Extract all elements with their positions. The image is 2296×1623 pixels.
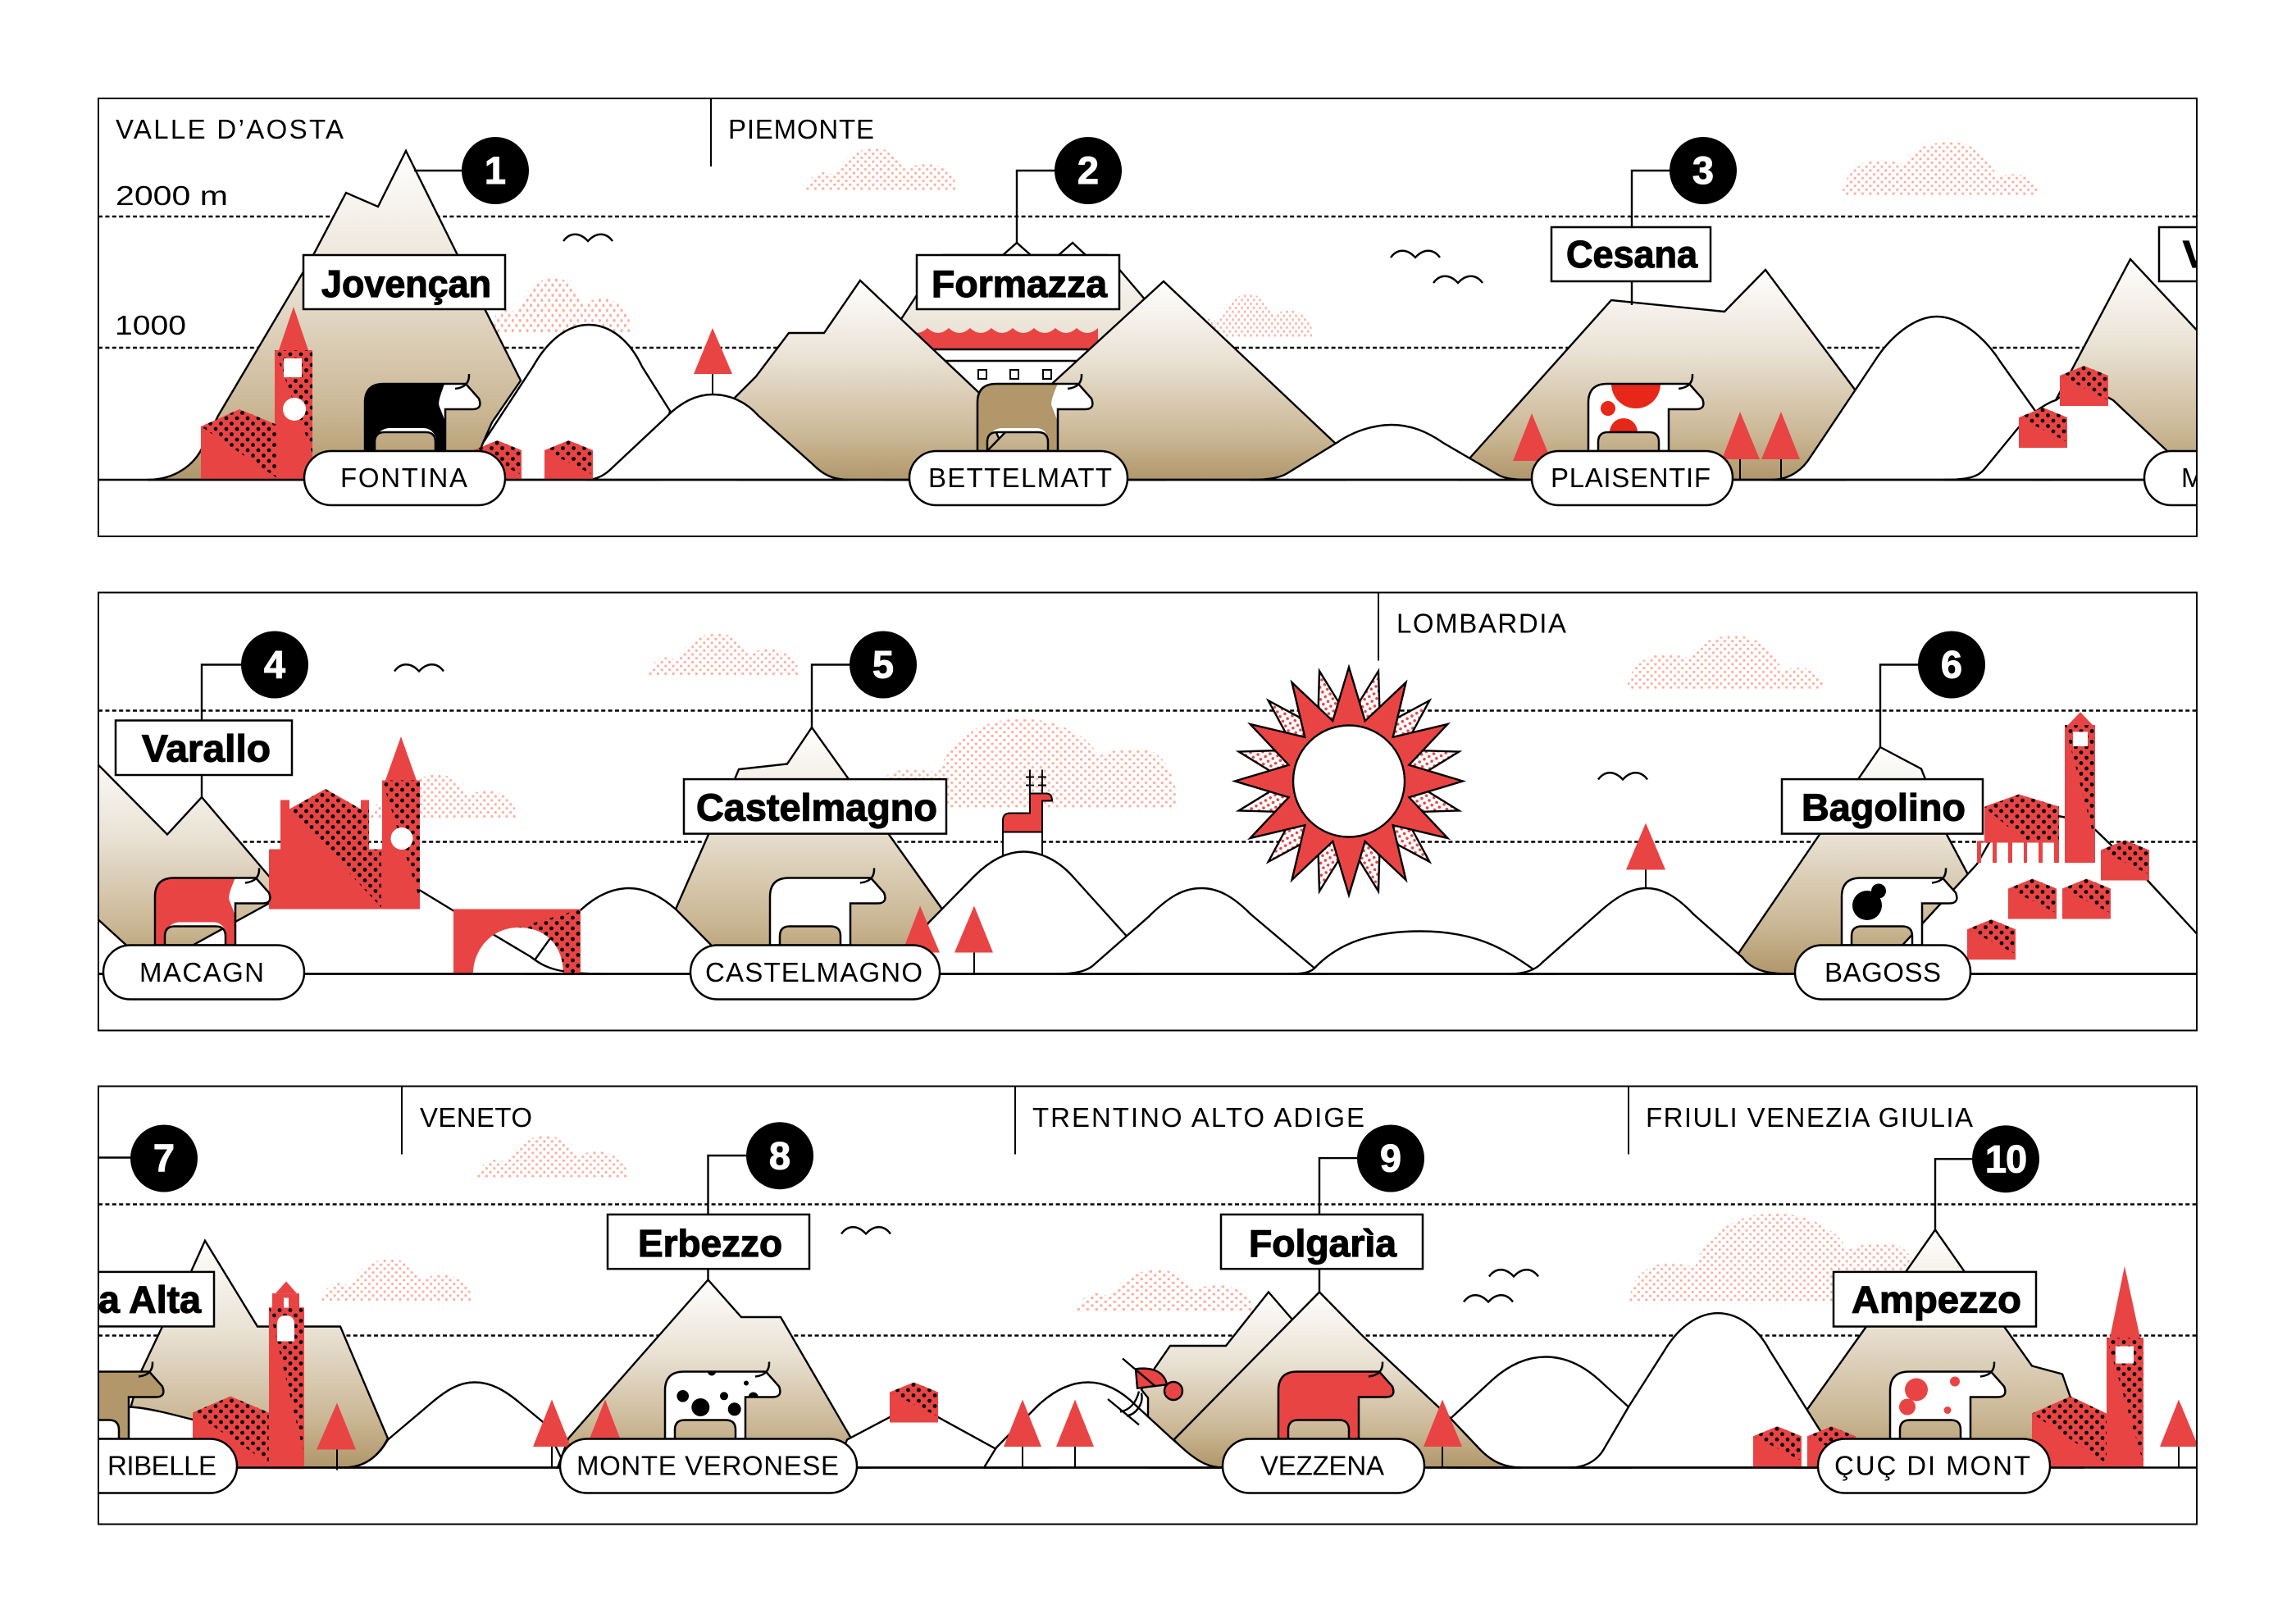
hill — [1451, 1356, 1632, 1468]
panel: Piemonte and Lombardia — [82, 592, 2214, 1030]
label: Cesana: Cesana — [1566, 233, 1697, 276]
region: Piemonte: PIEMONTE — [728, 114, 874, 144]
tree — [1626, 823, 1665, 889]
cloud — [490, 278, 631, 333]
mountain: Alta — [115, 1241, 388, 1468]
hill with skier — [984, 1383, 1223, 1468]
number 7 — [130, 1125, 198, 1192]
tree — [1424, 1399, 1462, 1468]
pill: Monte Veronese — [560, 1438, 857, 1493]
label: Ampezzo — [1834, 1272, 2036, 1327]
number 9: 9 — [1380, 1137, 1401, 1179]
skier — [1108, 1358, 1182, 1425]
region: Lombardia: LOMBARDIA — [1396, 609, 1566, 638]
ground line — [98, 1466, 2197, 1469]
label: Varallo start: V — [2183, 233, 2208, 276]
number 10: 10 — [1985, 1137, 2026, 1181]
hill with chapel — [902, 851, 1140, 974]
mountain: Varallo start — [2034, 259, 2214, 480]
hill — [1771, 317, 2050, 480]
tree — [1722, 412, 1760, 480]
region: Trentino Alto Adige: TRENTINO ALTO ADIGE — [1032, 1102, 1364, 1133]
number 3: 3 — [1692, 148, 1714, 192]
tree — [317, 1402, 356, 1470]
hill — [1058, 888, 1328, 974]
label: Jovençan — [303, 255, 505, 309]
cloud — [869, 718, 1178, 808]
mountain: behind Folgarìa — [1141, 1292, 1312, 1468]
cloud — [1207, 294, 1312, 337]
tree — [902, 905, 940, 953]
leader 1 — [414, 169, 462, 172]
altitude 2000 m: 2000 m — [116, 180, 228, 211]
label: Formazza: Formazza — [932, 262, 1107, 305]
mountain: Varallo — [82, 748, 279, 974]
region: Veneto: VENETO — [420, 1102, 532, 1133]
house — [2008, 879, 2057, 919]
number 8: 8 — [769, 1133, 790, 1178]
house — [2062, 879, 2111, 919]
cloud — [806, 148, 957, 190]
tower — [269, 1281, 304, 1469]
house — [473, 440, 522, 481]
label: Formazza — [917, 255, 1119, 309]
church and bell tower — [2032, 1266, 2143, 1468]
ground line — [98, 479, 2197, 481]
mountain: Jovençan — [148, 151, 521, 480]
ground line — [98, 973, 2197, 975]
house — [2019, 408, 2067, 448]
hill — [1569, 1313, 1837, 1468]
number 10 — [1972, 1125, 2039, 1192]
region divider — [1378, 592, 1379, 661]
cloud — [1842, 142, 2039, 196]
label: Castelmagno: Castelmagno — [696, 786, 937, 828]
leader 10 — [1935, 1159, 2006, 1230]
label: Alta: a Alta — [98, 1278, 201, 1320]
church with tower — [201, 307, 312, 480]
hill with tree base — [586, 394, 849, 480]
bird — [1433, 276, 1483, 283]
label: Ampezzo: Ampezzo — [1852, 1278, 2021, 1320]
sun — [1210, 641, 1488, 921]
cow: Çuç di Mont — [1890, 1361, 2005, 1438]
region: Valle d'Aosta: VALLE D’AOSTA — [116, 114, 344, 144]
leader 8 — [708, 1156, 780, 1279]
pill: Fontina — [304, 451, 505, 505]
hill with tree — [1509, 888, 1788, 974]
panel: Valle d'Aosta and Piemonte — [98, 98, 2296, 536]
mountain: Bagolino — [1738, 747, 1984, 974]
pill: Plaisentif — [1532, 451, 1733, 505]
pill: Castelmagno — [690, 945, 940, 999]
bird — [841, 1227, 891, 1233]
number 2 — [1055, 137, 1122, 204]
cow: Macagn — [153, 868, 270, 948]
cloud — [371, 774, 517, 818]
number 8 — [746, 1122, 813, 1189]
number 2: 2 — [1077, 148, 1099, 192]
leader 9 — [1319, 1158, 1391, 1292]
pill: Macagn — [103, 945, 304, 999]
hill — [481, 323, 671, 481]
pill: Monte Veronese: MONTE VERONESE — [576, 1450, 839, 1481]
tree — [954, 905, 993, 974]
cow: Vezzena — [1278, 1361, 1393, 1438]
pill: Castelmagno: CASTELMAGNO — [705, 957, 922, 987]
house — [2101, 840, 2149, 881]
mountain: left of Formazza — [735, 280, 1017, 480]
panel frame — [98, 98, 2197, 536]
leader 4 — [202, 664, 275, 797]
label: Varallo — [116, 720, 292, 775]
tree — [586, 1399, 623, 1447]
house — [2060, 366, 2108, 406]
altitude 1000: 1000 — [115, 310, 186, 340]
mountain: Folgarìa — [1174, 1292, 1522, 1468]
hill — [344, 1383, 566, 1468]
mountain: Erbezzo — [558, 1279, 869, 1468]
label: Bagolino — [1782, 779, 1983, 834]
number 1: 1 — [485, 148, 506, 192]
mountain: Ampezzo — [1796, 1230, 2083, 1468]
hill with house — [836, 1406, 1050, 1468]
leader 7 — [98, 1156, 164, 1159]
pill: Çuç di Mont: ÇUÇ DI MONT — [1834, 1450, 2030, 1481]
label: Jovençan: Jovençan — [321, 262, 491, 305]
region: Friuli Venezia Giulia: FRIULI VENEZIA GIULIA — [1646, 1102, 1973, 1133]
house — [544, 440, 593, 481]
number 1 — [462, 137, 529, 204]
label: Bagolino: Bagolino — [1802, 786, 1966, 828]
pill: Bettelmatt: BETTELMATT — [928, 463, 1112, 493]
pill: Bagoss: BAGOSS — [1824, 957, 1941, 987]
label: Alta — [49, 1272, 214, 1326]
bird — [563, 235, 613, 241]
label: Folgarìa: Folgarìa — [1249, 1222, 1396, 1265]
region divider — [1014, 1086, 1016, 1155]
cow: Monte Veronese — [665, 1361, 780, 1438]
house — [1807, 1426, 1856, 1467]
mountain: Cesana — [1460, 270, 1855, 480]
region divider — [710, 98, 712, 166]
label: Varallo: Varallo — [142, 727, 271, 769]
pill: Macagn: MACAGN — [139, 957, 264, 987]
church — [269, 736, 420, 909]
tree — [1761, 412, 1800, 480]
bird — [1391, 251, 1440, 258]
number 7: 7 — [153, 1137, 175, 1179]
region divider — [1628, 1086, 1629, 1155]
town: church and tower — [1977, 712, 2095, 863]
low hill — [1287, 932, 1558, 974]
cloud — [1627, 636, 1824, 690]
label: Varallo start — [2159, 227, 2241, 281]
leader 6 — [1880, 664, 1952, 747]
leader 3 — [1630, 169, 1670, 305]
number 6: 6 — [1941, 643, 1962, 686]
region divider — [401, 1086, 403, 1155]
leader 5 — [812, 664, 883, 727]
cloud — [649, 633, 800, 676]
cloud — [1629, 1214, 1923, 1301]
pill: Vezzena: VEZZENA — [1260, 1450, 1384, 1481]
tree — [1004, 1399, 1041, 1468]
cow: Bagoss — [1842, 868, 1957, 945]
bird — [1598, 773, 1647, 779]
pill: Fontina: FONTINA — [340, 463, 467, 493]
label: Folgarìa — [1221, 1215, 1423, 1269]
number 3 — [1670, 137, 1737, 204]
pill: Çuç di Mont — [1818, 1438, 2050, 1493]
bird — [1489, 1270, 1538, 1276]
pill: Bagoss — [1795, 945, 1970, 999]
pill: Ribelle — [49, 1438, 237, 1493]
house — [1967, 919, 2016, 960]
label: Cesana — [1551, 227, 1711, 281]
mountain: Formazza back ridge and village — [886, 243, 1164, 480]
tree — [1056, 1399, 1094, 1468]
pill: Ribelle: RIBELLE — [107, 1450, 216, 1481]
mountain: right of Formazza — [959, 281, 1345, 480]
cow: Plaisentif — [1588, 374, 1705, 450]
number 4 — [241, 631, 308, 699]
hill with houses — [1943, 396, 2168, 481]
pill: Vezzena — [1223, 1438, 1424, 1493]
pill: Bettelmatt — [909, 451, 1128, 505]
hill — [1250, 425, 1528, 480]
leader 2 — [1015, 169, 1055, 243]
hill under church — [172, 855, 605, 974]
bird — [394, 664, 444, 671]
label: Erbezzo: Erbezzo — [638, 1222, 782, 1265]
pill: Plaisentif: PLAISENTIF — [1551, 463, 1711, 493]
small hill — [82, 904, 139, 974]
house — [890, 1383, 938, 1422]
house — [193, 1396, 269, 1468]
tree — [1513, 413, 1551, 461]
bird — [1464, 1295, 1513, 1302]
tree — [533, 1399, 571, 1468]
panel frame — [98, 592, 2197, 1030]
panel: Veneto, Trentino Alto Adige and Friuli Venezia Giulia — [48, 1086, 2198, 1524]
hill with town — [1894, 815, 2214, 974]
number 4: 4 — [264, 643, 285, 686]
cow: Castelmagno — [770, 868, 885, 945]
arch bridge — [453, 909, 581, 974]
cloud — [477, 1136, 628, 1178]
mountain: Castelmagno — [676, 727, 976, 974]
cow: Bettelmatt — [975, 374, 1092, 454]
white hill behind cow — [82, 1402, 205, 1468]
pill: Macagn start: M — [2181, 463, 2204, 493]
tree — [694, 328, 732, 394]
panel frame — [98, 1086, 2197, 1524]
cow: Ribelle — [48, 1361, 163, 1438]
number 9 — [1357, 1125, 1424, 1192]
chapel — [1003, 769, 1052, 859]
cloud — [321, 1260, 472, 1301]
label: Erbezzo — [608, 1215, 809, 1269]
cloud — [1077, 1270, 1253, 1311]
number 6 — [1918, 631, 1985, 699]
hill — [525, 888, 722, 974]
tree — [2160, 1399, 2198, 1468]
house — [1753, 1426, 1802, 1467]
cow: Fontina — [365, 374, 488, 451]
number 5 — [850, 631, 917, 699]
pill: Macagn start — [2144, 451, 2296, 505]
number 5: 5 — [872, 643, 894, 686]
